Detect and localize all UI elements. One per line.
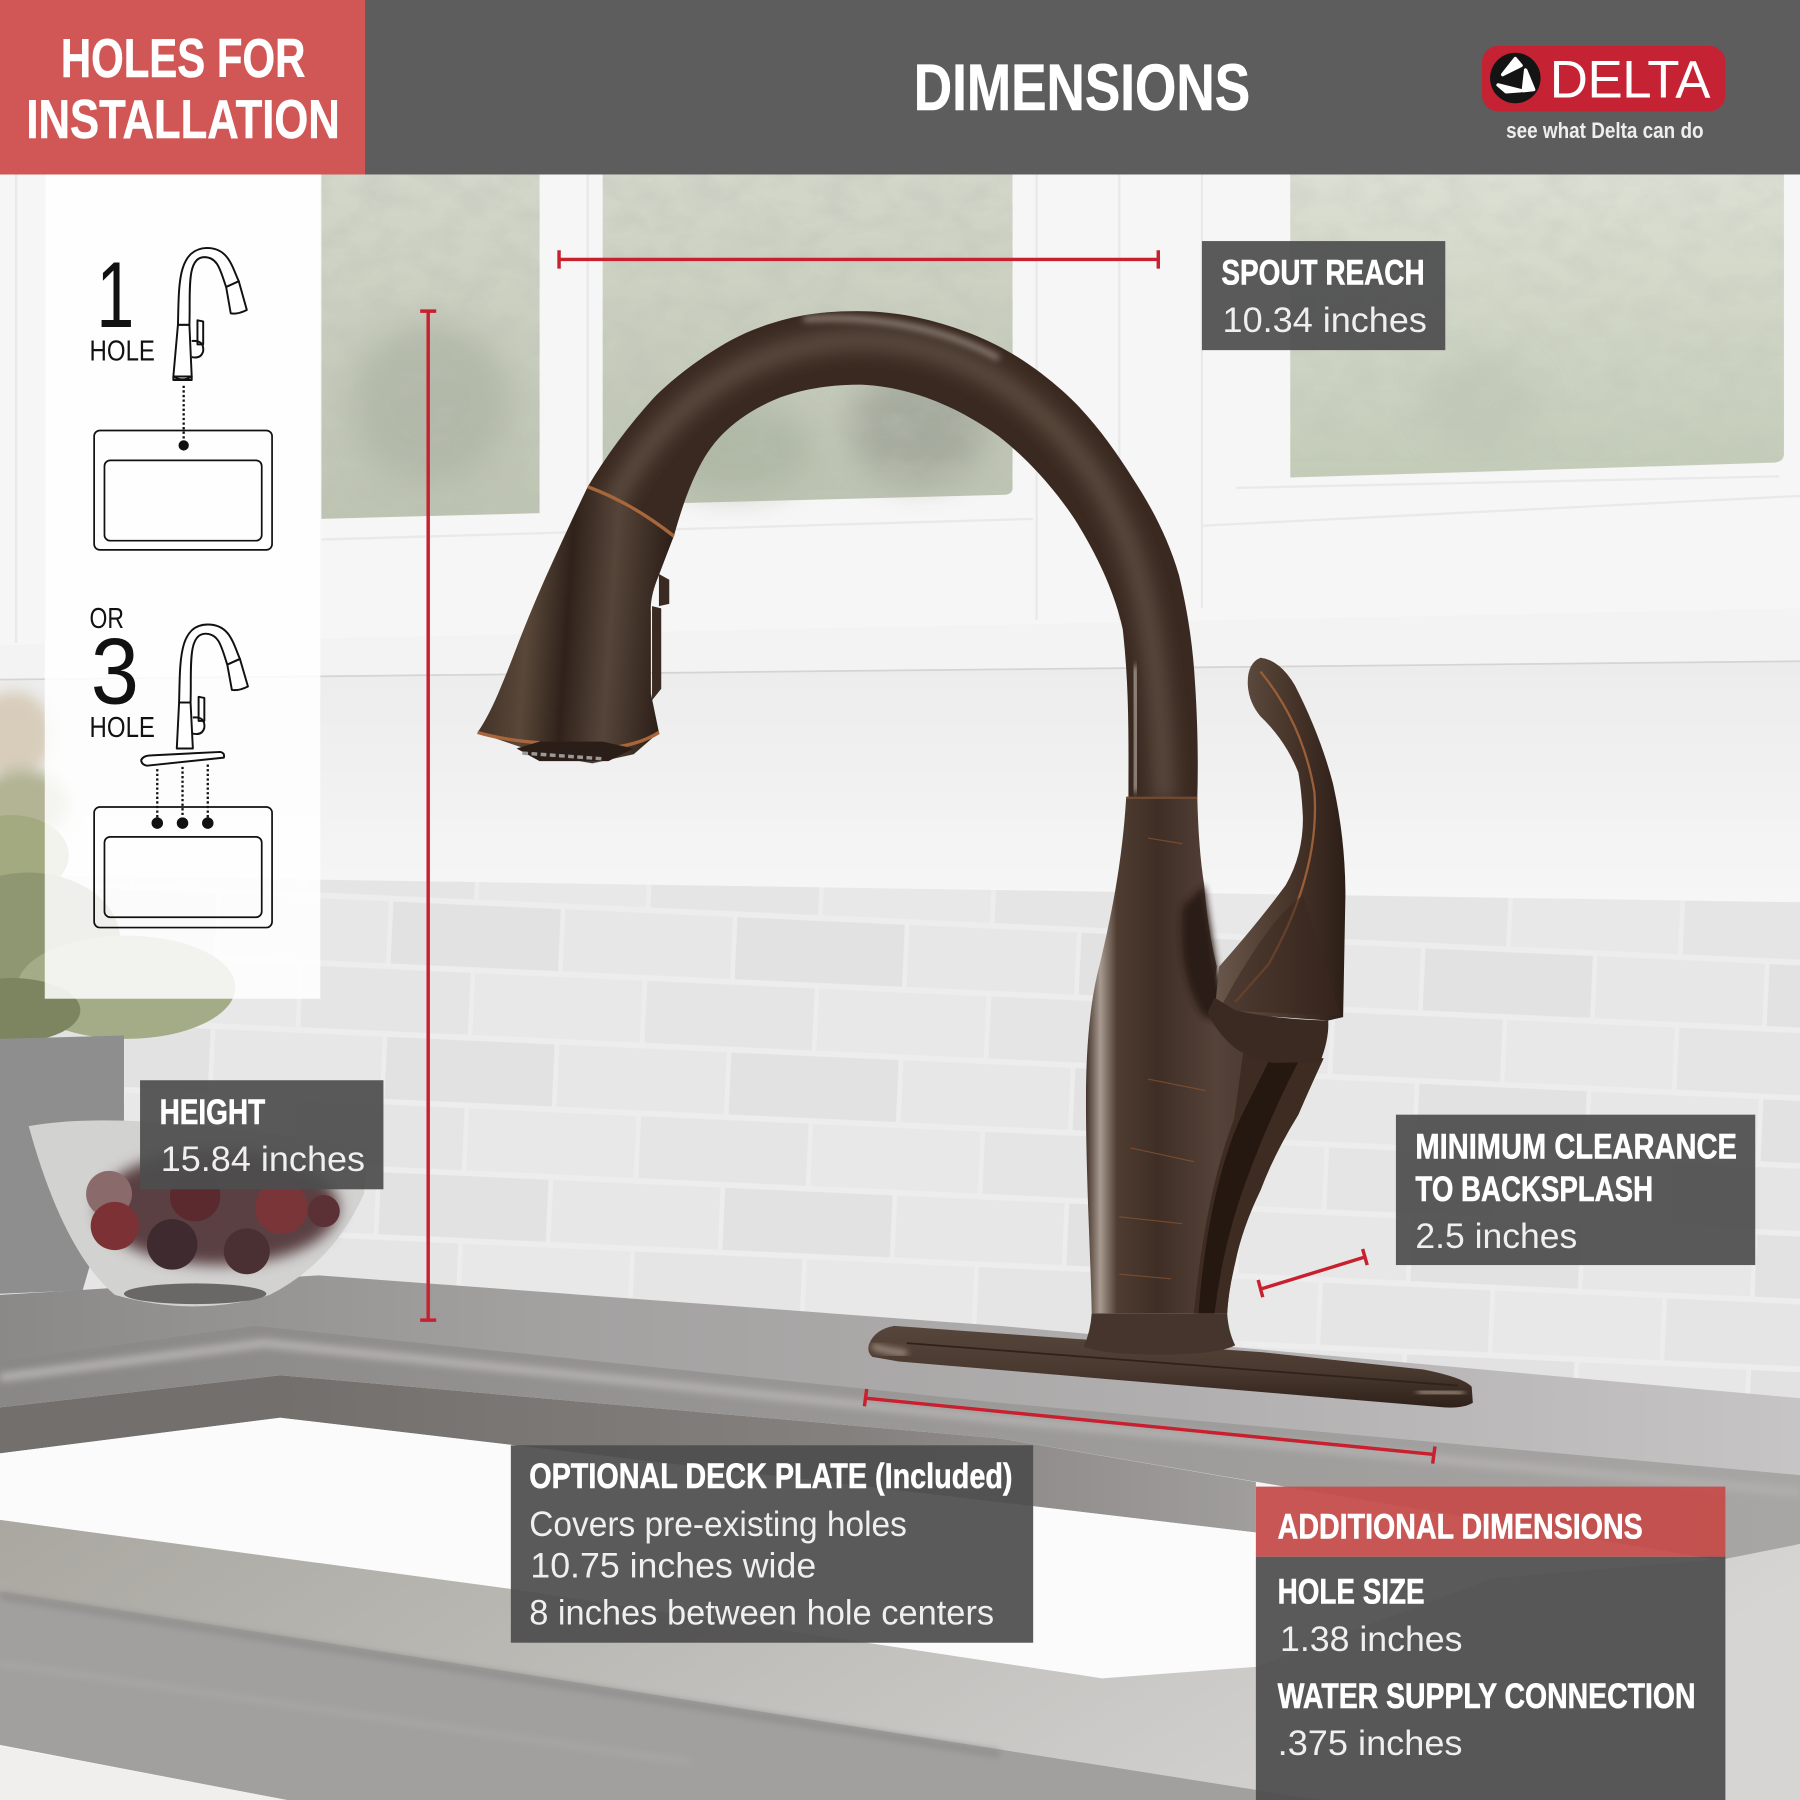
numeral 1: 1 xyxy=(96,242,134,347)
front moulding xyxy=(0,1591,1320,1800)
red measure line xyxy=(420,311,436,1320)
heading: holes for installation: HOLES FOR xyxy=(61,27,305,89)
header bar xyxy=(0,0,1800,174)
red header block xyxy=(0,0,365,174)
dimension: deck plate xyxy=(511,1389,1435,1643)
water supply connection: .375 inches xyxy=(1278,1723,1462,1763)
foliage texture xyxy=(321,174,1784,513)
connector xyxy=(183,386,185,439)
sink basin xyxy=(0,1418,1256,1678)
heading: dimensions: DIMENSIONS xyxy=(914,51,1250,124)
handle base ring xyxy=(1208,998,1328,1063)
window pane: centre xyxy=(603,174,1012,505)
callout: 10.75 inches wide xyxy=(530,1545,816,1585)
callout: OPTIONAL DECK PLATE (Included) xyxy=(529,1456,1013,1496)
Delta logo: see what Delta can do xyxy=(1506,118,1704,143)
3 hole option xyxy=(90,603,272,928)
label hole second: HOLE xyxy=(90,712,155,744)
plant xyxy=(0,691,235,1042)
callout: 2.5 inches xyxy=(1415,1216,1577,1256)
callout: 8 inches between hole centers xyxy=(529,1592,994,1632)
window pane: left xyxy=(321,174,540,519)
deck plate xyxy=(868,1326,1473,1408)
heading: holes for installation: INSTALLATION xyxy=(26,88,340,150)
ring joint at tube xyxy=(1126,797,1197,799)
body xyxy=(1086,798,1324,1313)
pot xyxy=(0,1035,124,1294)
numeral 3: 3 xyxy=(91,619,139,724)
hole size: 1.38 inches xyxy=(1280,1619,1463,1659)
body shadow side xyxy=(1194,1053,1324,1313)
icon: sink with three holes xyxy=(94,807,272,928)
callout: Covers pre-existing holes xyxy=(529,1504,907,1544)
dimension: height xyxy=(140,311,436,1320)
brushed copper streaks xyxy=(1119,838,1205,1279)
label hole: HOLE xyxy=(90,335,155,367)
spray head xyxy=(478,487,674,763)
water supply connection: WATER SUPPLY CONNECTION xyxy=(1278,1676,1696,1716)
hole size xyxy=(1278,1572,1462,1659)
icon: faucet with deck plate xyxy=(141,624,248,766)
callout: 10.34 inches xyxy=(1223,300,1427,340)
spout sheen xyxy=(597,318,1164,804)
counter moulding xyxy=(0,1326,1800,1561)
body dark stripe xyxy=(1198,1062,1298,1313)
connectors xyxy=(157,765,208,817)
callout: SPOUT REACH xyxy=(1221,253,1425,293)
water supply connection xyxy=(1278,1676,1696,1763)
icon: faucet single hole xyxy=(173,248,247,380)
wall xyxy=(0,661,1800,902)
red measure line xyxy=(1258,1249,1367,1297)
window pane: right xyxy=(1290,174,1784,478)
red measure line xyxy=(864,1389,1435,1464)
countertop xyxy=(0,1275,1800,1504)
panel: additional dimensions xyxy=(1256,1487,1725,1800)
hole size: HOLE SIZE xyxy=(1278,1572,1425,1612)
heading: holes for installation xyxy=(26,27,340,150)
dimension: minimum clearance xyxy=(1258,1115,1755,1297)
floor xyxy=(0,1746,287,1800)
faucet xyxy=(478,311,1473,1408)
1 hole option xyxy=(90,242,272,550)
callout: MINIMUM CLEARANCE xyxy=(1415,1126,1737,1166)
panel body xyxy=(1256,1557,1725,1800)
callout: HEIGHT xyxy=(160,1092,265,1132)
translucent icon panel xyxy=(45,174,320,999)
collar xyxy=(1084,1313,1235,1355)
callout: TO BACKSPLASH xyxy=(1415,1169,1653,1209)
Delta logo: DELTA xyxy=(1550,51,1711,110)
window frame lines xyxy=(16,174,1800,643)
callout xyxy=(140,1080,383,1189)
sink apron xyxy=(0,1375,1256,1533)
handle xyxy=(1208,658,1345,1063)
dimension: spout reach xyxy=(559,241,1445,350)
callout xyxy=(511,1445,1033,1643)
body groove xyxy=(1181,885,1234,1027)
red measure line xyxy=(559,250,1158,269)
panel title: ADDITIONAL DIMENSIONS xyxy=(1278,1506,1643,1546)
callout: 15.84 inches xyxy=(161,1139,365,1179)
panel header xyxy=(1256,1487,1725,1557)
callout xyxy=(1396,1115,1755,1265)
bowl of cherries xyxy=(29,1120,367,1306)
arched spout xyxy=(588,311,1198,798)
icon: sink with one hole xyxy=(94,430,272,550)
tile backsplash xyxy=(0,875,1800,1423)
lower counter xyxy=(0,1520,1800,1800)
label or: OR xyxy=(90,603,124,635)
Delta logo xyxy=(1482,46,1725,143)
callout xyxy=(1202,241,1445,350)
window sill xyxy=(0,608,1800,680)
tree shading xyxy=(350,321,1538,494)
